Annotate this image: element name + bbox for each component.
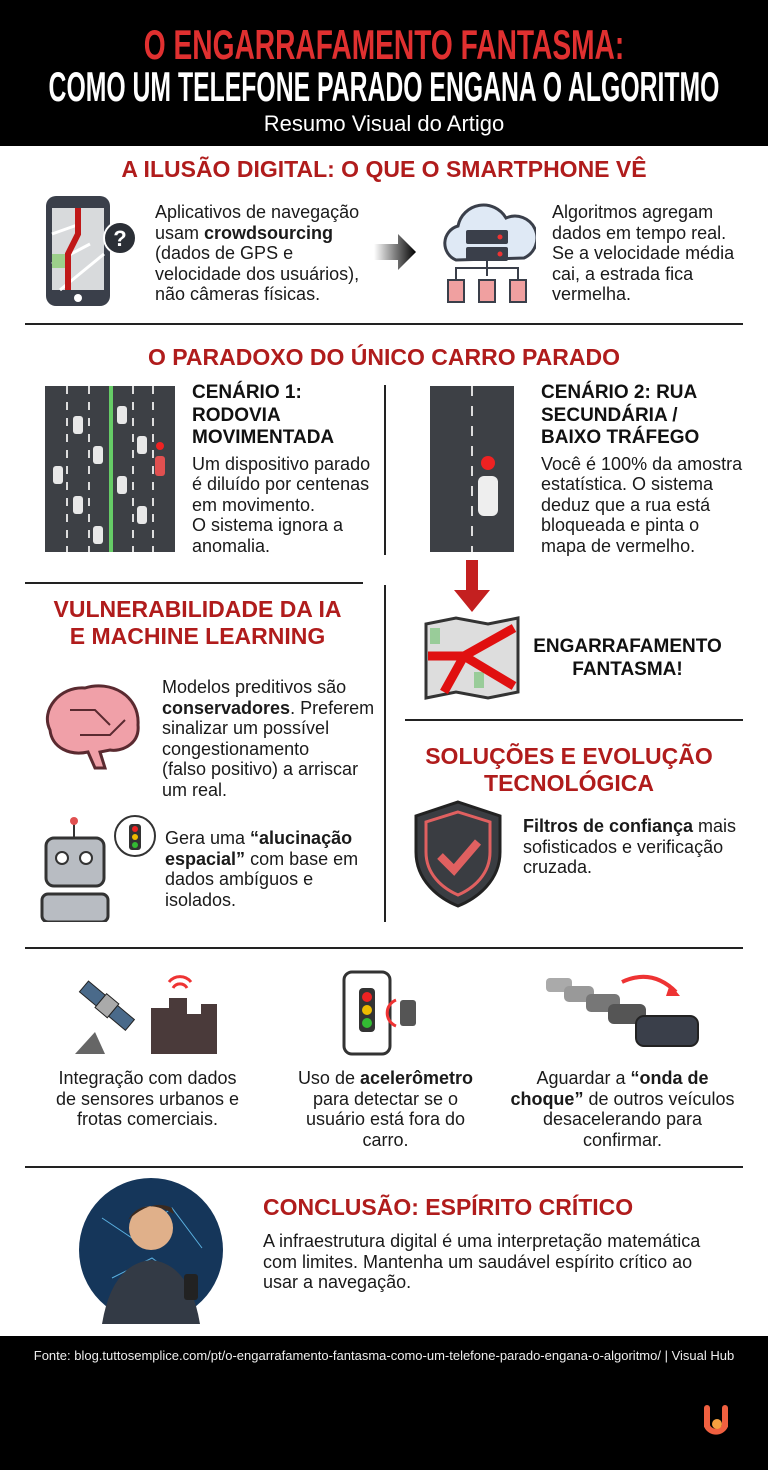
text: crowdsourcing — [155, 202, 359, 304]
text: modelos: (falso positivo) a arriscar — [162, 759, 358, 779]
text: crowdsourcing: (dados de GPS e — [155, 243, 293, 263]
text: cenário 2: estatística. O sistema — [541, 474, 713, 494]
text: cenário 1: em movimento. — [192, 495, 315, 515]
heading: soluções — [425, 743, 713, 796]
icon: shield — [414, 800, 502, 908]
text: filtros — [523, 816, 736, 877]
icon: phone: ? — [113, 226, 127, 251]
text: modelos — [162, 677, 374, 800]
icon: person thinking — [79, 1178, 223, 1324]
icon: map — [424, 616, 520, 700]
tagline: Resumo Visual do Artigo — [264, 111, 504, 136]
text: integração — [56, 1068, 239, 1129]
text: cenário 1 — [192, 380, 370, 556]
subtitle title line: COMO UM TELEFONE PARADO ENGANA O ALGORITMO — [49, 63, 719, 110]
text: cenário 1: O sistema ignora a — [192, 515, 343, 535]
text: cenário 2: CENÁRIO 2: RUA — [541, 382, 697, 403]
text: algoritmos: Algoritmos agregam — [552, 202, 713, 222]
text: integração: de sensores urbanos e — [56, 1089, 239, 1109]
text: cenário 1: é diluído por centenas — [192, 474, 369, 494]
text: onda de choque — [510, 1068, 735, 1150]
text: onda de choque: Aguardar a “onda de — [536, 1068, 709, 1088]
heading: vulnerabilidade: VULNERABILIDADE DA IA — [54, 596, 341, 622]
text: conclusão: A infraestrutura digital é uma interpretação matemática — [263, 1231, 700, 1251]
icon: satellite city — [75, 975, 217, 1054]
heading: vulnerabilidade: E MACHINE LEARNING — [70, 623, 325, 649]
text: algoritmos: Se a velocidade média — [552, 243, 734, 263]
text: cenário 2: SECUNDÁRIA / — [541, 404, 678, 426]
heading: conclusão: CONCLUSÃO: ESPÍRITO CRÍTICO — [263, 1194, 633, 1220]
text: crowdsourcing: velocidade dos usuários), — [155, 264, 359, 284]
text: cenário 1: MOVIMENTADA — [192, 427, 334, 448]
icon: highway — [45, 386, 175, 552]
text: conclusão — [263, 1231, 700, 1292]
text: modelos: congestionamento — [162, 739, 309, 759]
text: filtros: sofisticados e verificação — [523, 837, 723, 857]
text: algoritmos: vermelha. — [552, 284, 631, 304]
heading: paradoxo: O PARADOXO DO ÚNICO CARRO PARADO — [148, 344, 620, 370]
text: onda de choque: desacelerando para — [543, 1109, 702, 1129]
icon: brain — [46, 684, 140, 770]
text: alucinação: isolados. — [165, 890, 236, 910]
text: alucinação — [165, 828, 358, 910]
heading: soluções: SOLUÇÕES E EVOLUÇÃO — [425, 743, 713, 769]
text: cenário 1: anomalia. — [192, 536, 270, 556]
text: crowdsourcing: Aplicativos de navegação — [155, 202, 359, 222]
text: acelerômetro: usuário está fora do — [306, 1109, 465, 1129]
text: alucinação: espacial” com base em — [165, 849, 358, 869]
text: engarrafamento fantasma — [533, 636, 722, 680]
text: cenário 1: Um dispositivo parado — [192, 454, 370, 474]
text: integração: frotas comerciais. — [77, 1109, 218, 1129]
text: integração: Integração com dados — [58, 1068, 237, 1088]
text: cenário 1: RODOVIA — [192, 404, 281, 426]
text: filtros: Filtros de confiança mais — [523, 816, 736, 836]
text: acelerômetro — [298, 1068, 473, 1150]
heading: ilusão digital: A ILUSÃO DIGITAL: O QUE O SMARTPHONE VÊ — [121, 156, 647, 182]
arrow: down red — [454, 560, 490, 612]
text: onda de choque: choque” de outros veículos — [510, 1089, 735, 1109]
source text: Fonte: blog.tuttosemplice.com/pt/o-engarrafamento-fantasma-como-um-telefone-parado-engana-o-algoritmo/ | Visual Hub — [34, 1348, 734, 1363]
text: engarrafamento fantasma: ENGARRAFAMENTO — [533, 636, 722, 657]
text: cenário 1: CENÁRIO 1: — [192, 382, 302, 403]
text: acelerômetro: carro. — [362, 1130, 408, 1150]
text: algoritmos: dados em tempo real. — [552, 223, 726, 243]
text: cenário 2 — [541, 380, 742, 556]
header — [0, 0, 768, 146]
text: algoritmos — [552, 202, 734, 304]
footer — [0, 1336, 768, 1470]
text: cenário 2: Você é 100% da amostra — [541, 454, 742, 474]
text: algoritmos: cai, a estrada fica — [552, 264, 693, 284]
icon: shockwave cars — [546, 974, 699, 1047]
text: onda de choque: confirmar. — [583, 1130, 662, 1150]
text: alucinação: dados ambíguos e — [165, 869, 313, 889]
text: acelerômetro: para detectar se o — [313, 1089, 458, 1109]
text: modelos: Modelos preditivos são — [162, 677, 346, 697]
text: crowdsourcing: não câmeras físicas. — [155, 284, 320, 304]
text: cenário 2: BAIXO TRÁFEGO — [541, 427, 699, 448]
text: modelos: um real. — [162, 780, 227, 800]
text: cenário 2: deduz que a rua está — [541, 495, 710, 515]
logo — [704, 1405, 728, 1435]
text: acelerômetro: Uso de acelerômetro — [298, 1068, 473, 1088]
text: alucinação: Gera uma “alucinação — [165, 828, 352, 848]
icon: cloud server — [443, 204, 536, 303]
icon: phone accelerometer — [342, 970, 416, 1056]
text: engarrafamento fantasma: FANTASMA! — [572, 658, 683, 680]
text: modelos: sinalizar um possível — [162, 718, 329, 738]
text: filtros: cruzada. — [523, 857, 592, 877]
text: modelos: conservadores. Preferem — [162, 698, 374, 718]
heading: vulnerabilidade — [54, 596, 341, 649]
icon: empty road — [430, 386, 514, 552]
heading: soluções: TECNOLÓGICA — [484, 770, 654, 796]
title: O ENGARRAFAMENTO FANTASMA: — [144, 21, 624, 68]
text: crowdsourcing: usam crowdsourcing — [155, 223, 333, 243]
icon: robot — [40, 815, 156, 922]
text: conclusão: usar a navegação. — [263, 1272, 411, 1292]
arrow — [376, 234, 416, 270]
text: cenário 2: bloqueada e pinta o — [541, 515, 699, 535]
text: cenário 2: mapa de vermelho. — [541, 536, 695, 556]
icon: phone — [46, 196, 135, 306]
text: conclusão: com limites. Mantenha um saudável espírito crítico ao — [263, 1252, 692, 1272]
